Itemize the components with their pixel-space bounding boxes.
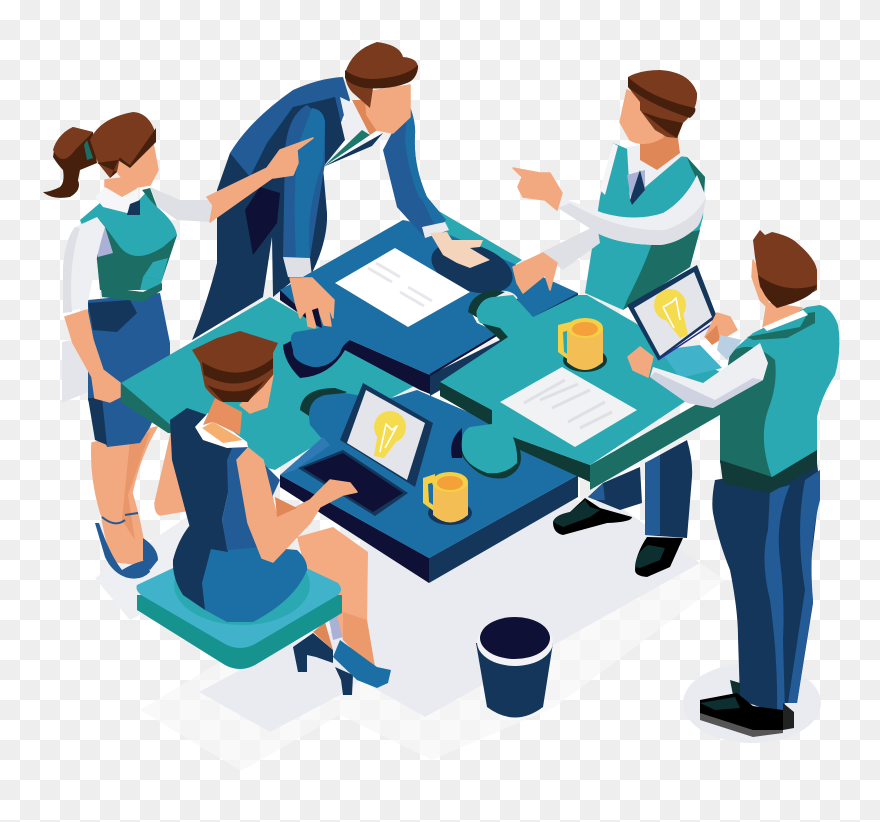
waste bin: [476, 617, 553, 718]
yellow mug on teal: [558, 318, 607, 372]
skirt: [88, 293, 170, 447]
collar band: [747, 312, 815, 340]
jacket back: [230, 77, 350, 177]
far hand and sleeve: [705, 313, 737, 340]
stool: [136, 545, 342, 669]
sleeve and arm: [97, 227, 113, 257]
teal left piece: [121, 297, 420, 470]
high heels: [95, 513, 158, 579]
near sleeve: [283, 105, 325, 258]
head: [752, 230, 817, 308]
cuff: [283, 257, 312, 277]
tablet: [627, 265, 717, 360]
belt: [100, 280, 162, 302]
man in navy suit: [192, 42, 449, 340]
head and ponytail: [43, 112, 158, 198]
far knee: [155, 425, 190, 515]
pointing arm: [150, 187, 213, 222]
vest: [720, 305, 839, 480]
trousers: [712, 463, 820, 713]
arm: [237, 448, 357, 562]
dark mouse pad: [425, 233, 519, 303]
vest: [80, 188, 177, 290]
man in teal vest, pointing: [513, 70, 706, 577]
puzzle table: [121, 210, 725, 583]
far sleeve: [540, 225, 600, 270]
neck and head: [192, 331, 278, 435]
teal right piece: [440, 290, 725, 490]
head: [620, 70, 697, 143]
lightbulb: [374, 411, 406, 458]
waist band: [720, 450, 817, 493]
folder: [62, 323, 147, 403]
seated woman on stool: [136, 331, 391, 695]
head: [345, 42, 418, 135]
laptop with lightbulb: [298, 383, 433, 516]
trousers: [192, 120, 327, 340]
shirt and tie: [340, 97, 377, 143]
hands and cuff on the table: [290, 195, 557, 328]
floor shadows: [95, 500, 821, 771]
legs: [320, 565, 343, 640]
blue bottom piece: [280, 388, 578, 583]
skirt: [201, 540, 307, 622]
woman with ponytail: [43, 112, 313, 579]
paper with lines: [500, 367, 637, 447]
man with tablet: [627, 230, 839, 737]
near sleeve: [558, 175, 706, 245]
far sleeve: [383, 102, 449, 238]
near hand: [628, 347, 653, 377]
rear shoe: [293, 633, 333, 672]
trousers and shoes: [588, 467, 642, 510]
lightbulb: [654, 289, 688, 338]
pointing hand: [513, 168, 562, 210]
dark blue top piece: [280, 210, 578, 396]
near sleeve: [650, 343, 768, 408]
collar, neck, tie: [105, 177, 137, 200]
yellow mug on blue: [423, 472, 472, 525]
paper with lines: [335, 248, 470, 327]
shoes: [730, 680, 740, 698]
neck and collar: [763, 303, 802, 327]
shirt, neck, tie: [627, 140, 683, 200]
front heel: [333, 640, 391, 695]
legs: [92, 427, 157, 565]
collar: [195, 413, 248, 448]
vest: [585, 143, 705, 310]
dress bodice: [170, 408, 243, 552]
